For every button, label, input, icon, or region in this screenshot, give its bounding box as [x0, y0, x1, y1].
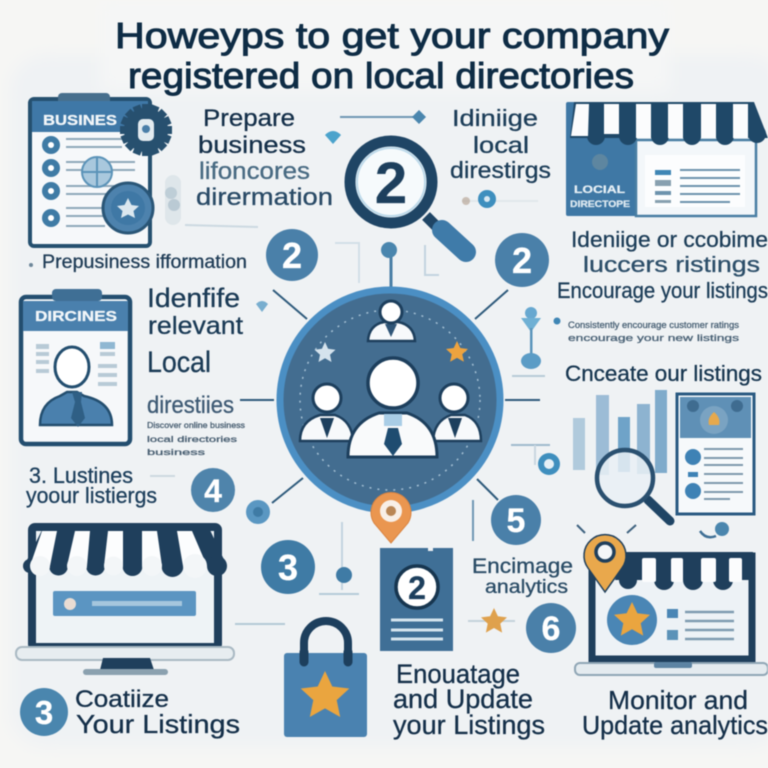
- text: prepare business heading: Prepare: [203, 105, 295, 132]
- text: prepare business heading: lifoncores: [199, 158, 310, 185]
- text: monitor and update analytics: Monitor and: [608, 685, 748, 715]
- badge: step 2 left: [266, 229, 318, 281]
- text: identify relevant local directories: relevant: [148, 312, 243, 340]
- icon: document with 2: [380, 548, 453, 651]
- icon: profile card: [677, 394, 754, 514]
- text: identify relevant local directories: Idenfife: [147, 283, 240, 313]
- icon: centre person: [348, 358, 437, 457]
- badge: step 6: 6: [542, 610, 560, 648]
- text: prepare business heading: business: [198, 132, 306, 159]
- text: step 3 listings: [26, 463, 157, 508]
- icon: directories clipboard: DIRCINES: [35, 308, 117, 325]
- text: customize your listings: Coatiize: [75, 686, 169, 713]
- icon: directories clipboard: [21, 289, 130, 444]
- icon: right person: [433, 384, 481, 441]
- icon: orange location pin: [371, 492, 411, 543]
- text: encourage analytics: [472, 555, 573, 598]
- text: prepare business heading: [196, 105, 333, 211]
- text: encourage your listings block: luccers ristings: [583, 252, 760, 277]
- text: customize your listings: Your Listings: [76, 709, 240, 739]
- badge: step 5: 5: [507, 502, 525, 540]
- icon: top person: [368, 301, 415, 341]
- text: identify relevant local directories: local directories: [147, 434, 237, 444]
- text: prepare business heading: dirermation: [196, 184, 333, 211]
- text: identify relevant local directories: direstiies: [147, 392, 234, 419]
- panel: local directory storefront: [566, 102, 768, 216]
- panel: local directory storefront: LOCIAL: [574, 184, 625, 196]
- text: encourage your listings block: Consistently encourage customer ratings: [568, 320, 739, 331]
- badge: step 2 right: [495, 233, 549, 287]
- text: encourage and update your listings: Enouatage: [396, 659, 520, 689]
- text: encourage your listings block: encourage your new listings: [568, 333, 739, 344]
- text: encourage and update your listings: and Update: [393, 684, 533, 714]
- badge: step 6: [526, 603, 576, 653]
- text: step 3 listings: 3. Lustines: [29, 463, 133, 488]
- text: encourage your listings block: [554, 227, 768, 386]
- icon: gold location pin: [584, 535, 626, 592]
- badge: step 2 right: 2: [512, 240, 532, 281]
- badge: step 3 bottom: 3: [35, 694, 53, 731]
- icon: left person: [300, 384, 353, 441]
- connector lines: [150, 117, 636, 624]
- bar chart: [573, 390, 667, 475]
- icon: central magnifier with 2: 2: [375, 151, 407, 216]
- text: identify local directories: direstirgs: [450, 157, 551, 183]
- icon: light star: [314, 342, 336, 362]
- panel: local directory storefront: DIRECTOPE: [570, 199, 630, 209]
- icon: storefront monitor: [16, 527, 234, 675]
- text: monitor and update analytics: [582, 685, 768, 740]
- text: identify relevant local directories: [147, 283, 245, 457]
- text: encourage and update your listings: your Listings: [393, 710, 545, 740]
- text: encourage analytics: analytics: [485, 577, 568, 598]
- text: identify relevant local directories: Local: [147, 346, 211, 379]
- icon: shopping bag with star: [284, 621, 367, 737]
- text: step 3 listings: yoour listiergs: [26, 483, 157, 508]
- badge: step 5: [491, 495, 541, 545]
- title: Howeyps to get your company: [115, 15, 669, 56]
- icon: small star: [481, 608, 507, 633]
- text: encourage analytics: Encimage: [472, 555, 573, 578]
- badge: step 3 middle: 3: [278, 547, 298, 588]
- text: identify local directories: local: [473, 132, 529, 158]
- icon: document with 2: 2: [408, 570, 426, 606]
- text: encourage your listings block: Ideniige or ccobime: [571, 227, 768, 252]
- badge: step 4: [191, 468, 235, 512]
- panel: identify relevant directories: [21, 283, 245, 512]
- title: [115, 15, 669, 96]
- title: registered on local directories: [128, 55, 634, 96]
- badge: step 3 bottom: [20, 688, 68, 736]
- text: customize your listings: [75, 686, 240, 739]
- icon: magnifier: [597, 450, 670, 521]
- icon: orange star: [446, 341, 468, 362]
- icon: business clipboard: BUSINES: [43, 112, 117, 129]
- badge: step 4: 4: [204, 473, 222, 509]
- badge: step 2 left: 2: [282, 235, 302, 276]
- small decorative pins: [165, 110, 729, 583]
- text: identify relevant local directories: Discover online business: [147, 420, 245, 430]
- text: encourage your listings block: Cnceate our listings: [565, 361, 762, 386]
- icon: laptop storefront: [575, 552, 768, 675]
- caption: business information: Prepusiness ifformation: [42, 252, 247, 273]
- panel: analytics chart with magnifier: [573, 390, 754, 521]
- badge: step 3 middle: [261, 540, 315, 594]
- icon: central magnifier with 2: [350, 141, 466, 252]
- text: identify relevant local directories: business: [147, 447, 205, 457]
- panel: prepare business information: [29, 93, 333, 273]
- icon: business clipboard: [30, 93, 172, 246]
- text: identify local directories: Idiniige: [452, 105, 538, 131]
- text: identify local directories: [450, 105, 551, 183]
- text: encourage and update your listings: [393, 659, 545, 740]
- central circle: team: [280, 290, 500, 510]
